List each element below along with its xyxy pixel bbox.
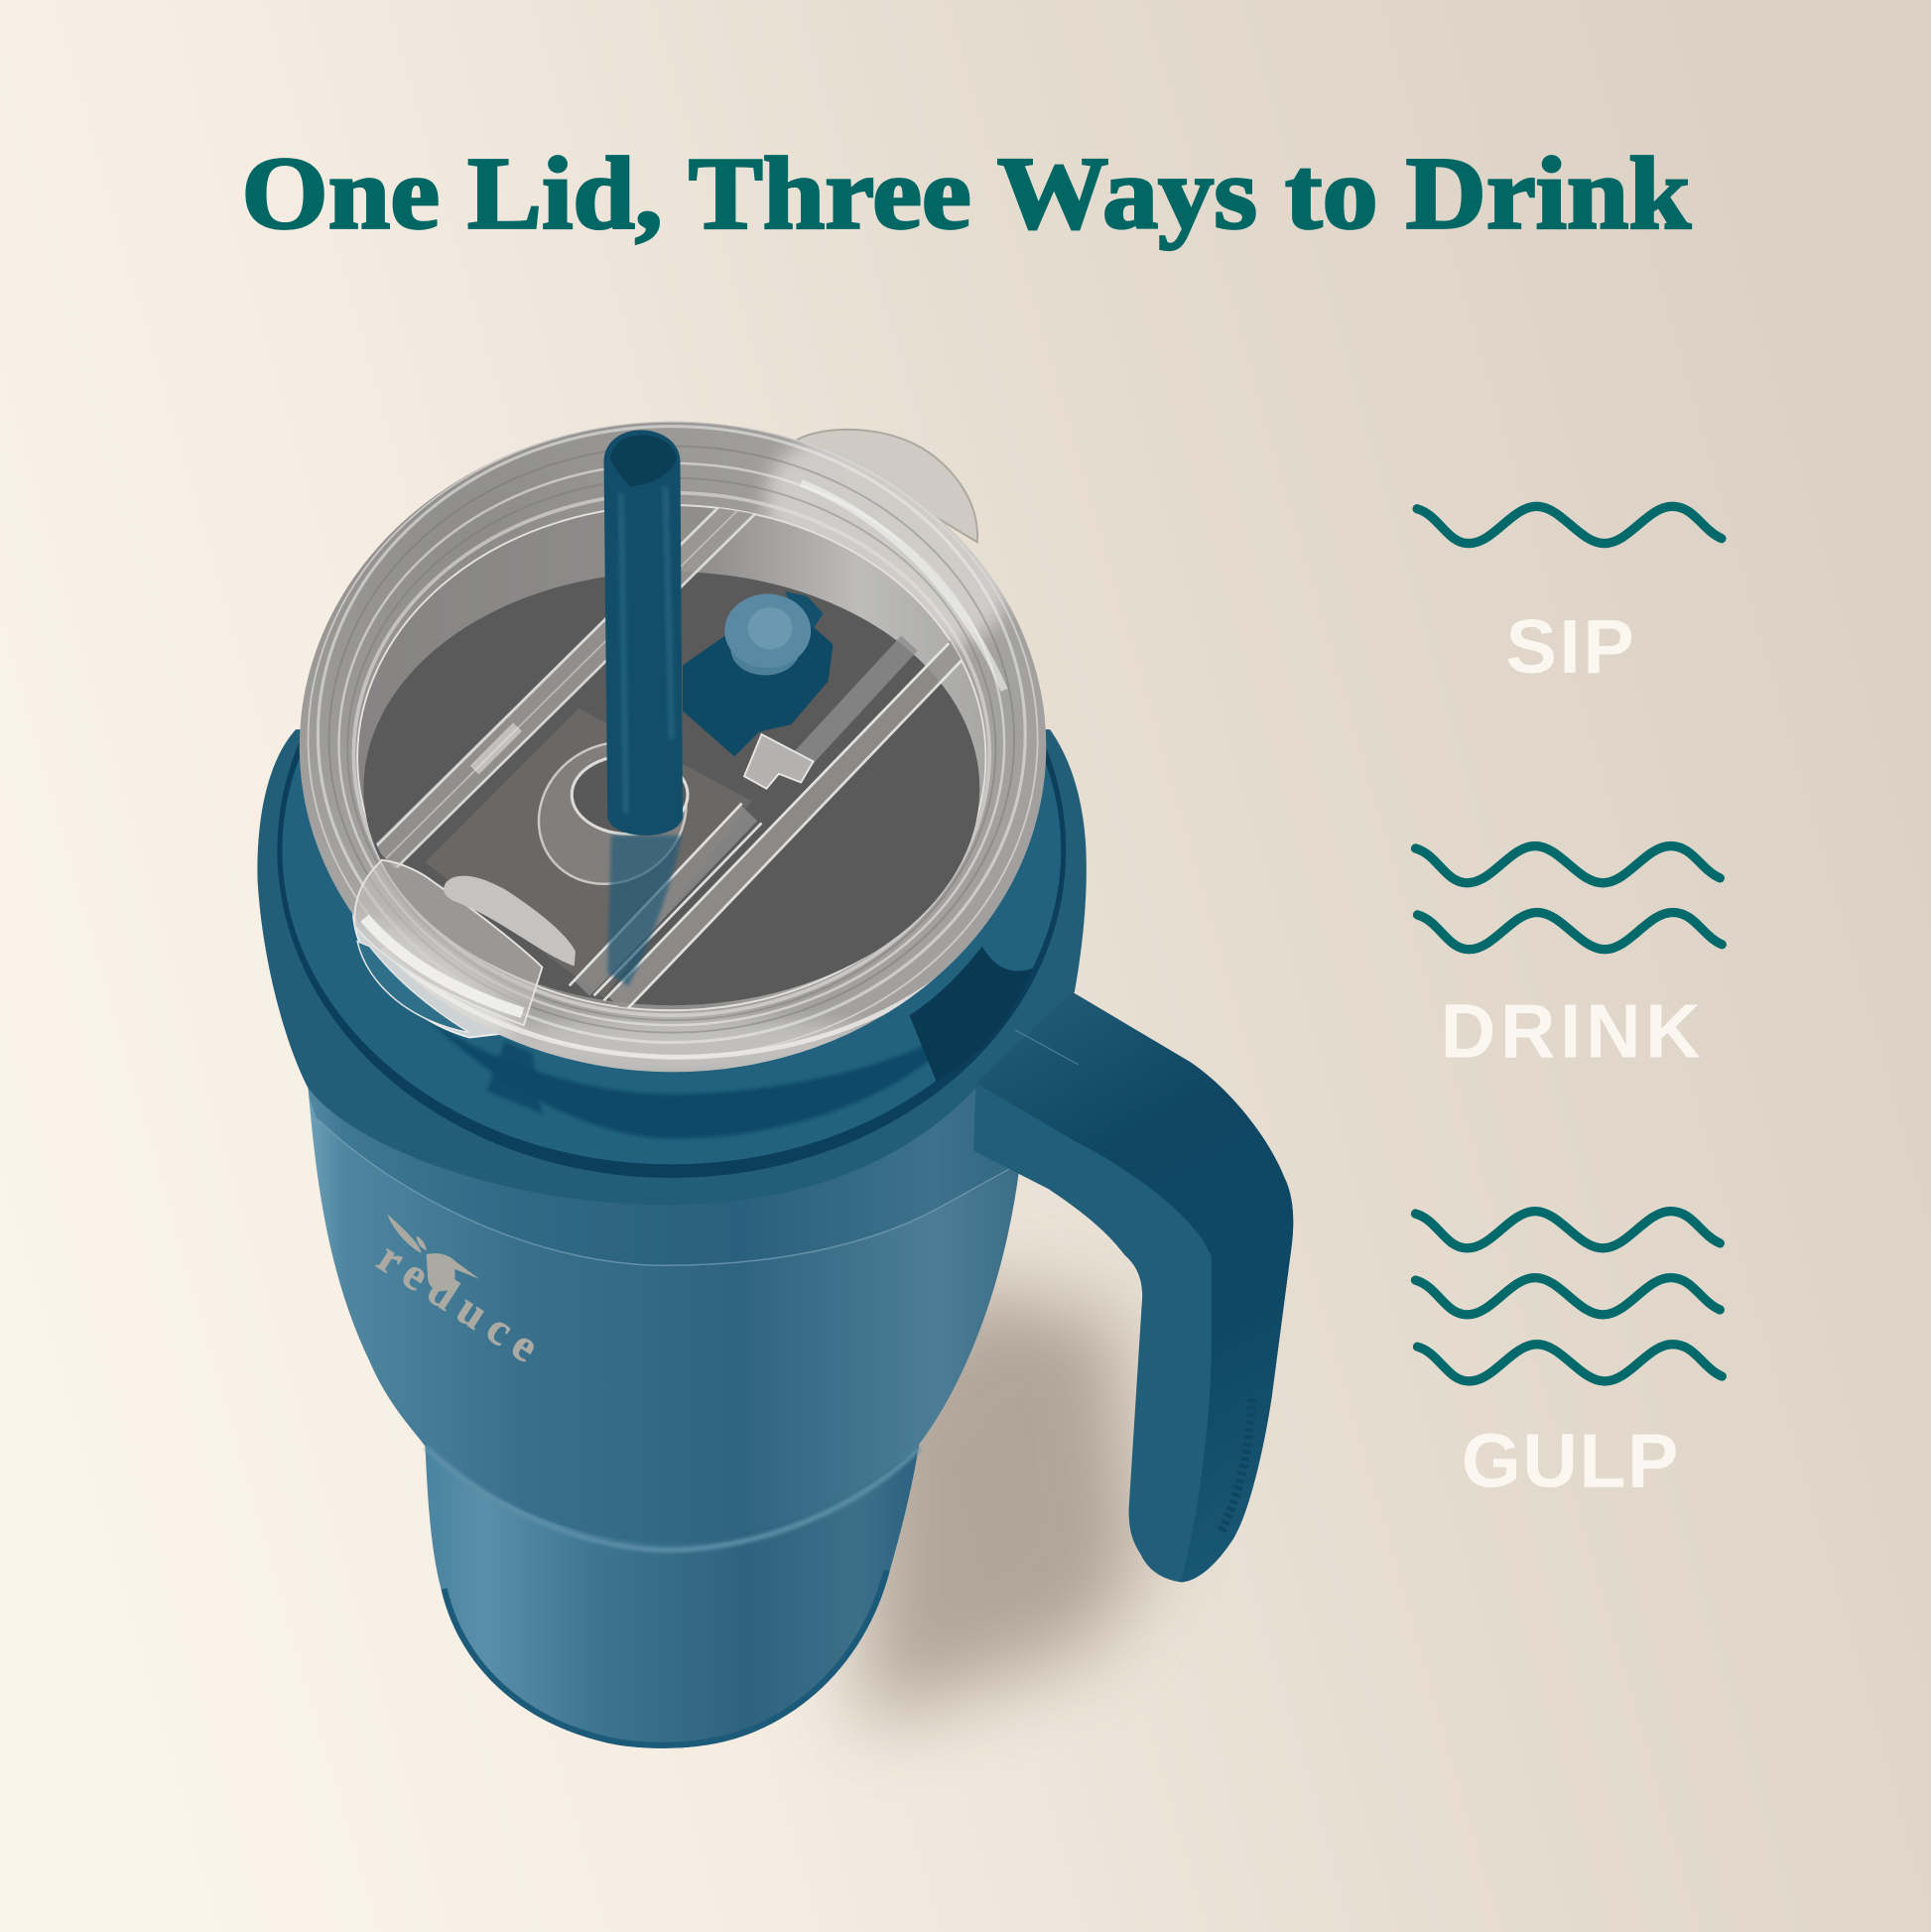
- lid rim: [300, 422, 1046, 1072]
- band above seam: [308, 1088, 1011, 1252]
- lid window dark interior: [363, 572, 979, 1005]
- legend: drink: [1416, 846, 1722, 1074]
- logo mark: [387, 1214, 479, 1291]
- title: One Lid, Three Ways to Drink: [241, 136, 1691, 251]
- one wave: [1417, 506, 1722, 544]
- handle: [973, 992, 1293, 1582]
- stopper bracket: [683, 601, 833, 756]
- straw socket hole: [572, 755, 688, 835]
- lid rim rings: [308, 422, 1038, 1057]
- legend: gulp: [1416, 1212, 1722, 1504]
- legend: sip: [1417, 506, 1722, 690]
- neck groove: [277, 522, 1066, 1178]
- stopper plug: [724, 594, 811, 675]
- lid rim light patches: [332, 394, 1048, 1077]
- lid window wall: [357, 505, 985, 1010]
- stopper tab: [785, 591, 824, 628]
- lower rail: [570, 643, 968, 1010]
- straw: [604, 430, 683, 836]
- spout: [354, 860, 576, 1025]
- upper body seam: [317, 1118, 1018, 1265]
- handle dark outer face: [976, 992, 1293, 1582]
- neck dark band: [425, 1004, 985, 1138]
- drink label: DRINK: [1441, 988, 1701, 1074]
- three waves: [1416, 1212, 1722, 1381]
- tumbler upper body: [296, 1060, 1029, 1550]
- neck seen through lid: [357, 942, 469, 1033]
- tumbler illustration: [257, 394, 1293, 1748]
- straw highlights: [621, 486, 672, 814]
- clear lid: [300, 394, 1048, 1077]
- lid spout skirt: [353, 899, 542, 1038]
- neck right dark reflection: [909, 947, 1033, 1082]
- handle side face: [973, 992, 1293, 1582]
- two waves: [1416, 846, 1722, 950]
- handle embossed mark: [1220, 1398, 1252, 1534]
- straw opening: [610, 435, 677, 486]
- rail clip detail: [744, 734, 814, 789]
- spout clear rim: [354, 860, 542, 1025]
- pull tab: [795, 430, 977, 542]
- step ridge highlight: [427, 1448, 919, 1550]
- handle moulding line: [1015, 1030, 1079, 1065]
- channel lighter glass: [425, 708, 752, 998]
- spout bump: [444, 876, 576, 966]
- rubber collar: [257, 729, 1087, 1205]
- straw socket lens: [538, 742, 688, 885]
- brand logo: [369, 1214, 548, 1371]
- cast shadow: [862, 1281, 1146, 1725]
- sip label: SIP: [1506, 604, 1634, 690]
- gulp label: GULP: [1462, 1419, 1678, 1504]
- glossy neck: [277, 522, 1066, 1178]
- straw reflection: [607, 836, 682, 985]
- tumbler lower body: [425, 1442, 919, 1748]
- slider channel: [373, 473, 968, 1010]
- upper rail: [376, 508, 756, 869]
- neck left dark reflection: [487, 1041, 542, 1115]
- logo wordmark: reduce: [369, 1231, 548, 1371]
